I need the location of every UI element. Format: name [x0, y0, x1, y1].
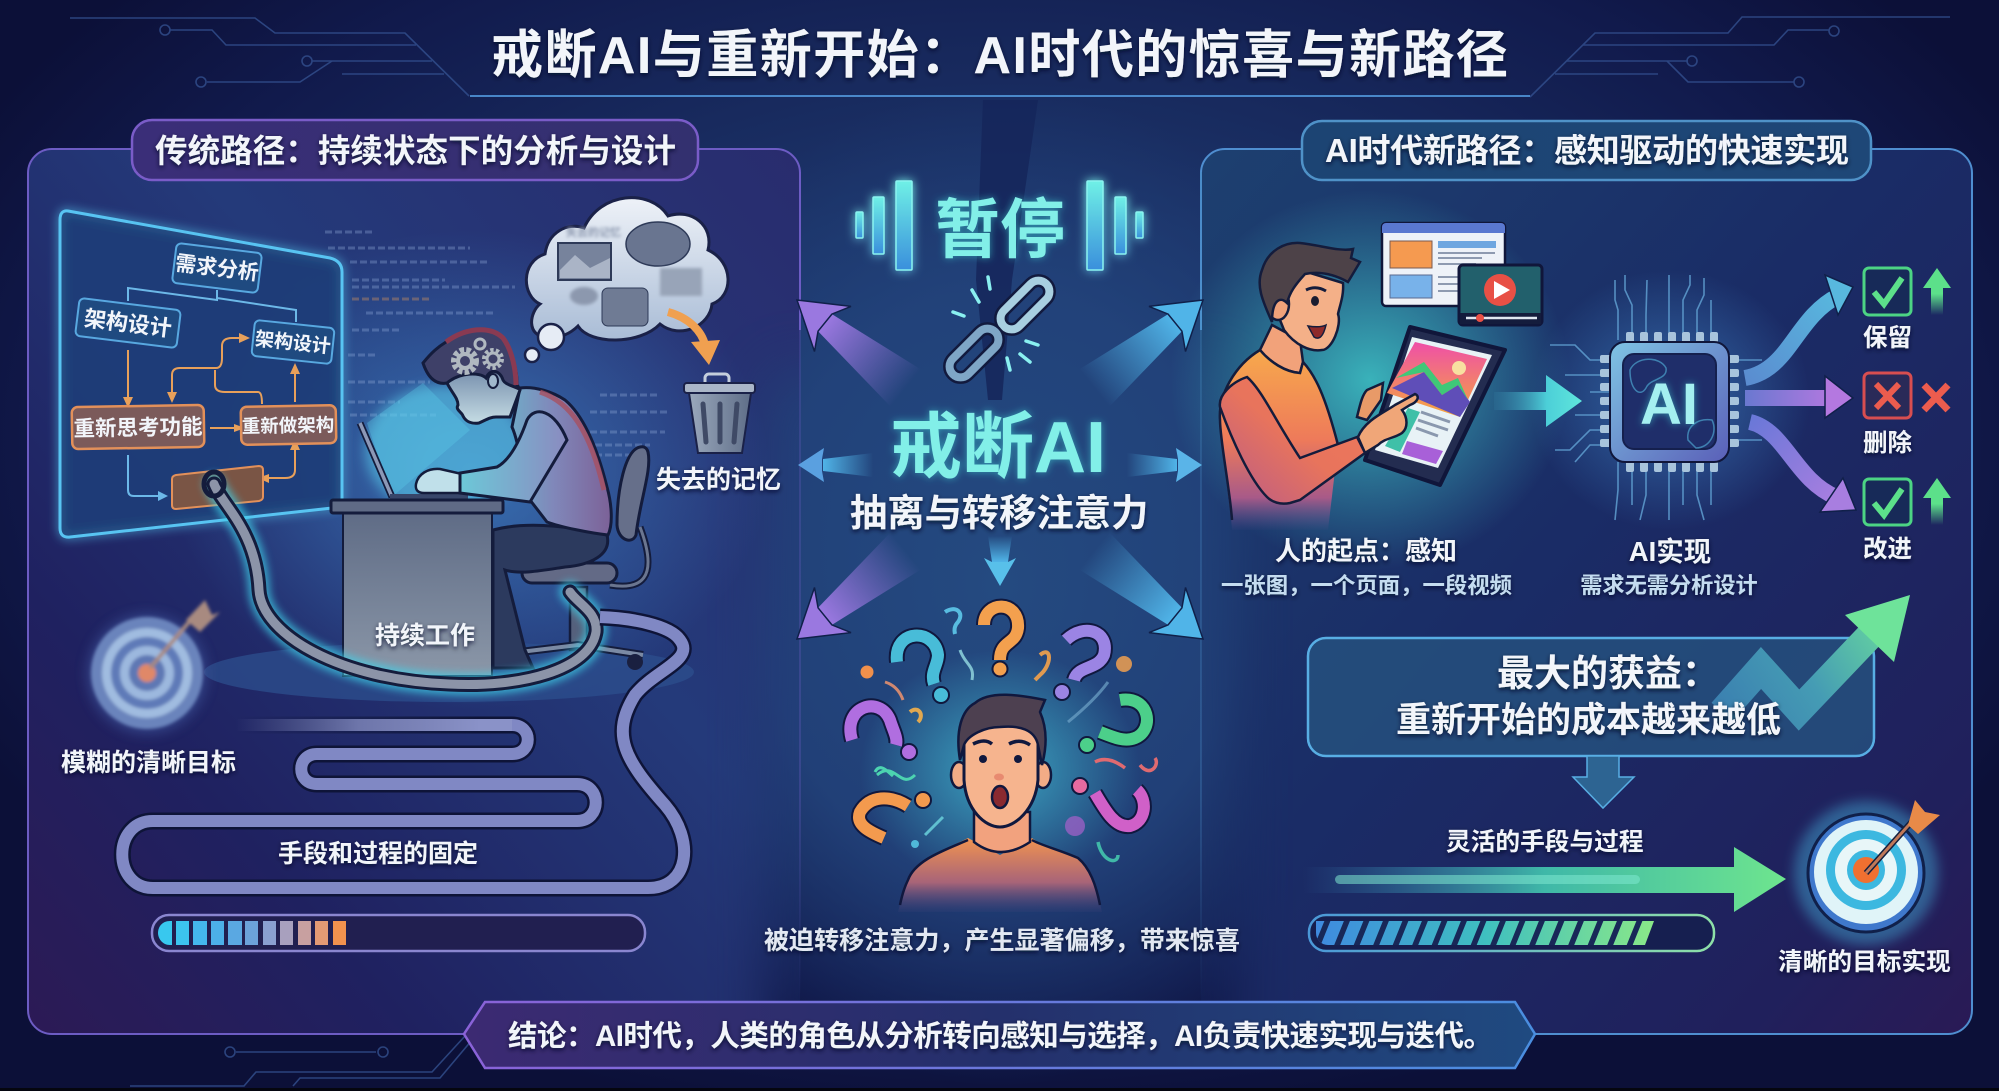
hand	[416, 469, 462, 493]
legs	[493, 525, 608, 668]
box: architecture right	[251, 320, 335, 364]
label: lost memory: 失去的记忆	[656, 466, 781, 494]
box: architecture left	[75, 298, 181, 348]
arrow to chip	[1494, 375, 1582, 427]
conclusion banner	[464, 1002, 1535, 1068]
box: cable socket	[172, 466, 263, 509]
arrow: up right	[1076, 277, 1221, 411]
hair	[423, 330, 517, 388]
arrow: up left	[779, 277, 924, 411]
floating web page	[1382, 223, 1505, 306]
arm	[1220, 377, 1365, 504]
label: clear goal: 清晰的目标实现	[1778, 948, 1951, 976]
cable from screen around desk	[204, 472, 596, 685]
heading: pause: 暂停	[935, 193, 1065, 266]
arrow: down right	[1076, 528, 1221, 662]
gears	[455, 339, 501, 371]
keep: check icon	[1864, 268, 1951, 315]
face details	[1311, 296, 1319, 306]
AI chip: AI	[1640, 372, 1698, 437]
box: redo architecture: 重新做架构	[242, 414, 334, 437]
heading pill right	[1302, 121, 1871, 180]
box: requirement analysis	[172, 243, 262, 293]
pins	[1600, 332, 1739, 472]
label: delete: 删除	[1863, 428, 1912, 457]
heading pill left: 传统路径：持续状态下的分析与设计	[155, 133, 676, 169]
box: rethink feature: 重新思考功能	[73, 415, 203, 441]
panel outline right	[1201, 149, 1972, 1034]
label: human start: 人的起点：感知	[1275, 536, 1457, 566]
callout: biggest gain	[1308, 595, 1910, 808]
conclusion banner: 结论：AI时代，人类的角色从分析转向感知与选择，AI负责快速实现与迭代。	[508, 1020, 1493, 1053]
label: AI implementation: AI实现	[1629, 536, 1711, 567]
glow behind person	[1170, 190, 1570, 570]
label: fixed means: 手段和过程的固定	[278, 839, 478, 868]
panel: traditional path	[28, 120, 800, 1034]
icon: broken chain	[945, 276, 1054, 382]
box: architecture right: 架构设计	[254, 328, 332, 358]
pause bars	[856, 181, 1143, 270]
question marks	[850, 607, 1156, 861]
box: redo architecture	[241, 405, 336, 445]
label: continuous work: 持续工作	[375, 622, 475, 650]
zigzag rising arrow	[1722, 595, 1910, 712]
shirt	[898, 838, 1102, 912]
face	[964, 716, 1038, 827]
hair	[958, 695, 1046, 765]
hands	[1357, 383, 1383, 420]
label: flexible means: 灵活的手段与过程	[1446, 827, 1644, 856]
faint code lines	[325, 232, 670, 455]
chair	[520, 447, 649, 670]
heading pill right: AI时代新路径：感知驱动的快速实现	[1325, 132, 1849, 169]
neck	[1260, 325, 1303, 373]
glow	[860, 650, 1140, 890]
progress bar right	[1309, 915, 1714, 951]
box: architecture left: 架构设计	[83, 306, 173, 341]
sublabel: AI implementation: 需求无需分析设计	[1580, 573, 1758, 598]
delete: cross icon	[1864, 373, 1948, 418]
face features	[973, 741, 1030, 745]
sublabel: human start: 一张图，一个页面，一段视频	[1221, 572, 1512, 598]
chip traces	[1550, 275, 1762, 520]
center: pause and disengage	[764, 181, 1240, 955]
progress bar left	[152, 915, 645, 951]
arrow: left	[798, 448, 873, 482]
laptop light beam	[367, 383, 470, 497]
box: requirement analysis: 需求分析	[174, 252, 260, 285]
heading pill left	[132, 120, 698, 180]
panel fill right	[1201, 149, 1972, 1034]
label: improve: 改进	[1863, 535, 1912, 563]
shirt	[1220, 350, 1338, 530]
arrow to trash	[668, 312, 720, 365]
floor glow	[204, 642, 694, 702]
floating video	[1459, 265, 1542, 325]
person with tablet	[1220, 243, 1505, 530]
heading: disengage AI: 戒断AI	[890, 408, 1106, 488]
laptop	[360, 423, 392, 497]
label: blurred goal: 模糊的清晰目标	[61, 749, 236, 777]
worker at desk	[331, 330, 649, 676]
panel fill left	[28, 149, 800, 1034]
head	[447, 362, 520, 423]
dark slash behind the center	[976, 100, 1038, 400]
panel: AI era path	[1170, 121, 1972, 1034]
workflow screen	[60, 211, 342, 537]
blurred target	[87, 600, 220, 734]
stem down	[1573, 756, 1634, 808]
label: keep: 保留	[1863, 324, 1912, 352]
head	[1272, 272, 1343, 350]
ears	[951, 762, 967, 788]
subheading: 抽离与转移注意力	[850, 492, 1148, 534]
arrow: down left	[779, 528, 924, 662]
title: 戒断AI与重新开始：AI时代的惊喜与新路径	[491, 27, 1508, 85]
hair	[1260, 243, 1360, 322]
arrow: right	[1127, 448, 1202, 482]
cloud of lost memories: 失去的记忆	[566, 225, 621, 239]
output arrows	[1745, 275, 1856, 512]
box: rethink feature	[72, 405, 204, 449]
callout: biggest gain: 重新开始的成本越来越低	[1396, 701, 1781, 740]
neck	[974, 812, 1030, 852]
improve: check icon	[1864, 478, 1951, 525]
AI chip	[1550, 275, 1762, 520]
torso	[512, 388, 611, 535]
clear target	[1794, 800, 1940, 945]
panel outline left	[28, 149, 800, 1034]
glow behind worker	[170, 230, 770, 710]
icon: trash can	[684, 374, 755, 453]
title bar line	[470, 94, 1530, 98]
connectors	[128, 288, 296, 496]
arrow: down	[984, 536, 1016, 586]
callout: biggest gain: 最大的获益：	[1497, 653, 1719, 694]
winding path	[122, 617, 684, 888]
arm	[460, 412, 567, 502]
flexible path arrow	[1303, 847, 1786, 912]
desk	[331, 500, 503, 676]
surprised person	[850, 607, 1156, 912]
caption: 被迫转移注意力，产生显著偏移，带来惊喜	[764, 926, 1240, 955]
tablet	[1365, 327, 1505, 485]
cloud of lost memories	[525, 198, 728, 362]
